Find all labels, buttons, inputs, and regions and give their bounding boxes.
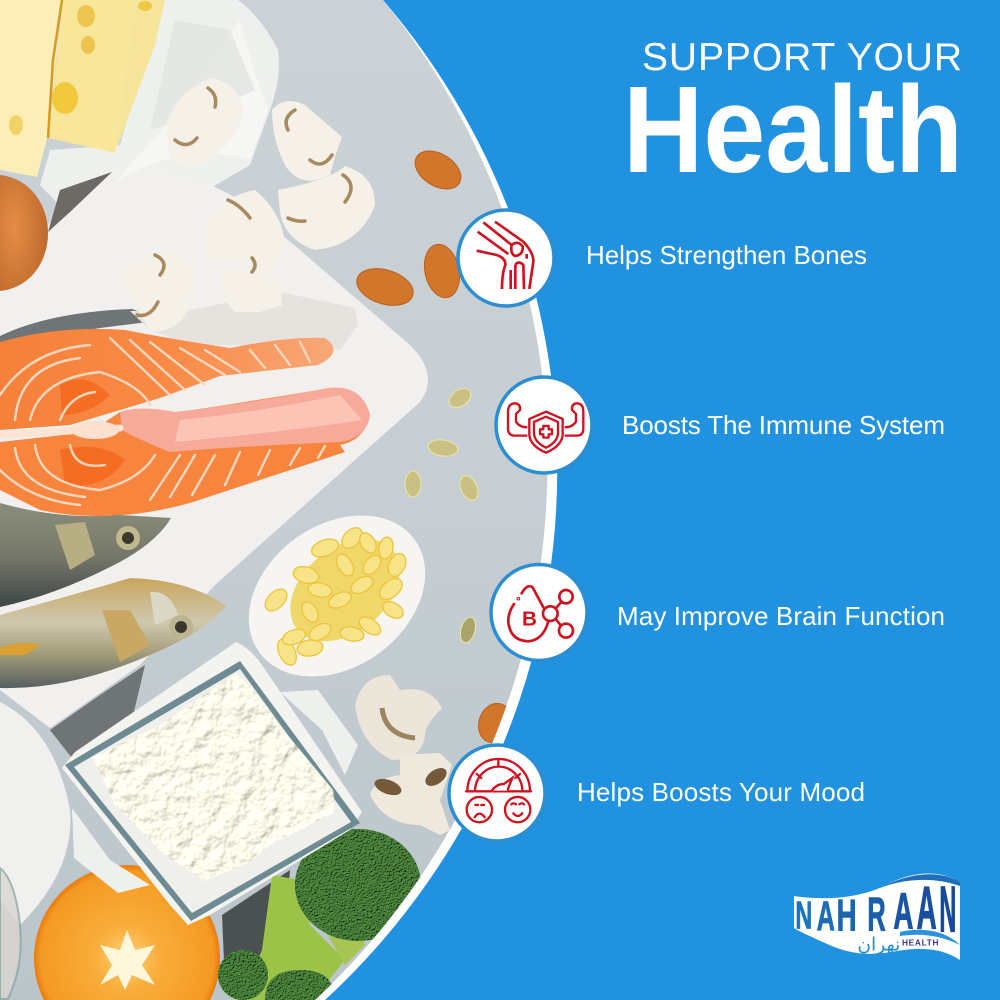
icon: knee joint bbox=[458, 210, 554, 306]
dark gap beneath dish bbox=[222, 870, 290, 959]
logo wordmark: HEALTH bbox=[902, 938, 939, 948]
benefit label: brain: May Improve Brain Function bbox=[617, 601, 945, 631]
white crescent border bbox=[0, 0, 557, 1000]
benefit label: mood: Helps Boosts Your Mood bbox=[577, 777, 865, 807]
cottage cheese dish bbox=[62, 642, 362, 925]
mushroom gills bbox=[137, 88, 351, 315]
logo wordmark: R bbox=[867, 888, 886, 941]
capsule dish bbox=[248, 516, 426, 676]
logo: Nahraan Health bbox=[794, 873, 960, 960]
logo wordmark: نهران bbox=[857, 935, 900, 956]
sardines bbox=[0, 503, 226, 688]
icon: vitamin B drop molecule: B bbox=[522, 608, 537, 631]
logo wordmark: N bbox=[795, 893, 812, 937]
wax paper bbox=[40, 0, 279, 212]
logo wordmark: A bbox=[917, 873, 937, 941]
logo wordmark bbox=[795, 873, 956, 956]
mushroom slices on tray bbox=[139, 78, 375, 331]
loose capsules bbox=[405, 385, 482, 644]
salmon fat lines bbox=[0, 338, 325, 505]
drinking glass bbox=[0, 868, 21, 999]
benefit label: bones: Helps Strengthen Bones bbox=[586, 240, 867, 270]
title: SUPPORT YOUR: SUPPORT YOUR bbox=[642, 36, 962, 79]
logo wordmark: N bbox=[939, 874, 956, 946]
food photo disc bbox=[0, 0, 600, 1000]
milk jug bbox=[0, 702, 70, 925]
icon: vitamin B drop molecule bbox=[491, 564, 587, 660]
grey napkin bbox=[50, 665, 145, 762]
cheese blocks bbox=[0, 0, 165, 177]
icon: mood gauge with faces bbox=[449, 745, 545, 841]
egg bbox=[0, 175, 48, 291]
benefit label: immune: Boosts The Immune System bbox=[622, 410, 945, 440]
orange half bbox=[34, 865, 220, 1000]
broccoli bbox=[218, 829, 421, 1000]
icon: shield with flexed arms bbox=[496, 377, 592, 473]
salmon steaks bbox=[0, 293, 370, 516]
paper highlight bbox=[112, 20, 268, 185]
almonds bbox=[352, 143, 517, 747]
logo wordmark: A bbox=[893, 882, 913, 940]
logo wordmark: A bbox=[817, 894, 835, 940]
title: Health: Health bbox=[623, 62, 963, 199]
table mushrooms bbox=[355, 675, 452, 835]
serving tray bbox=[0, 169, 428, 728]
logo wordmark: H bbox=[837, 890, 857, 940]
